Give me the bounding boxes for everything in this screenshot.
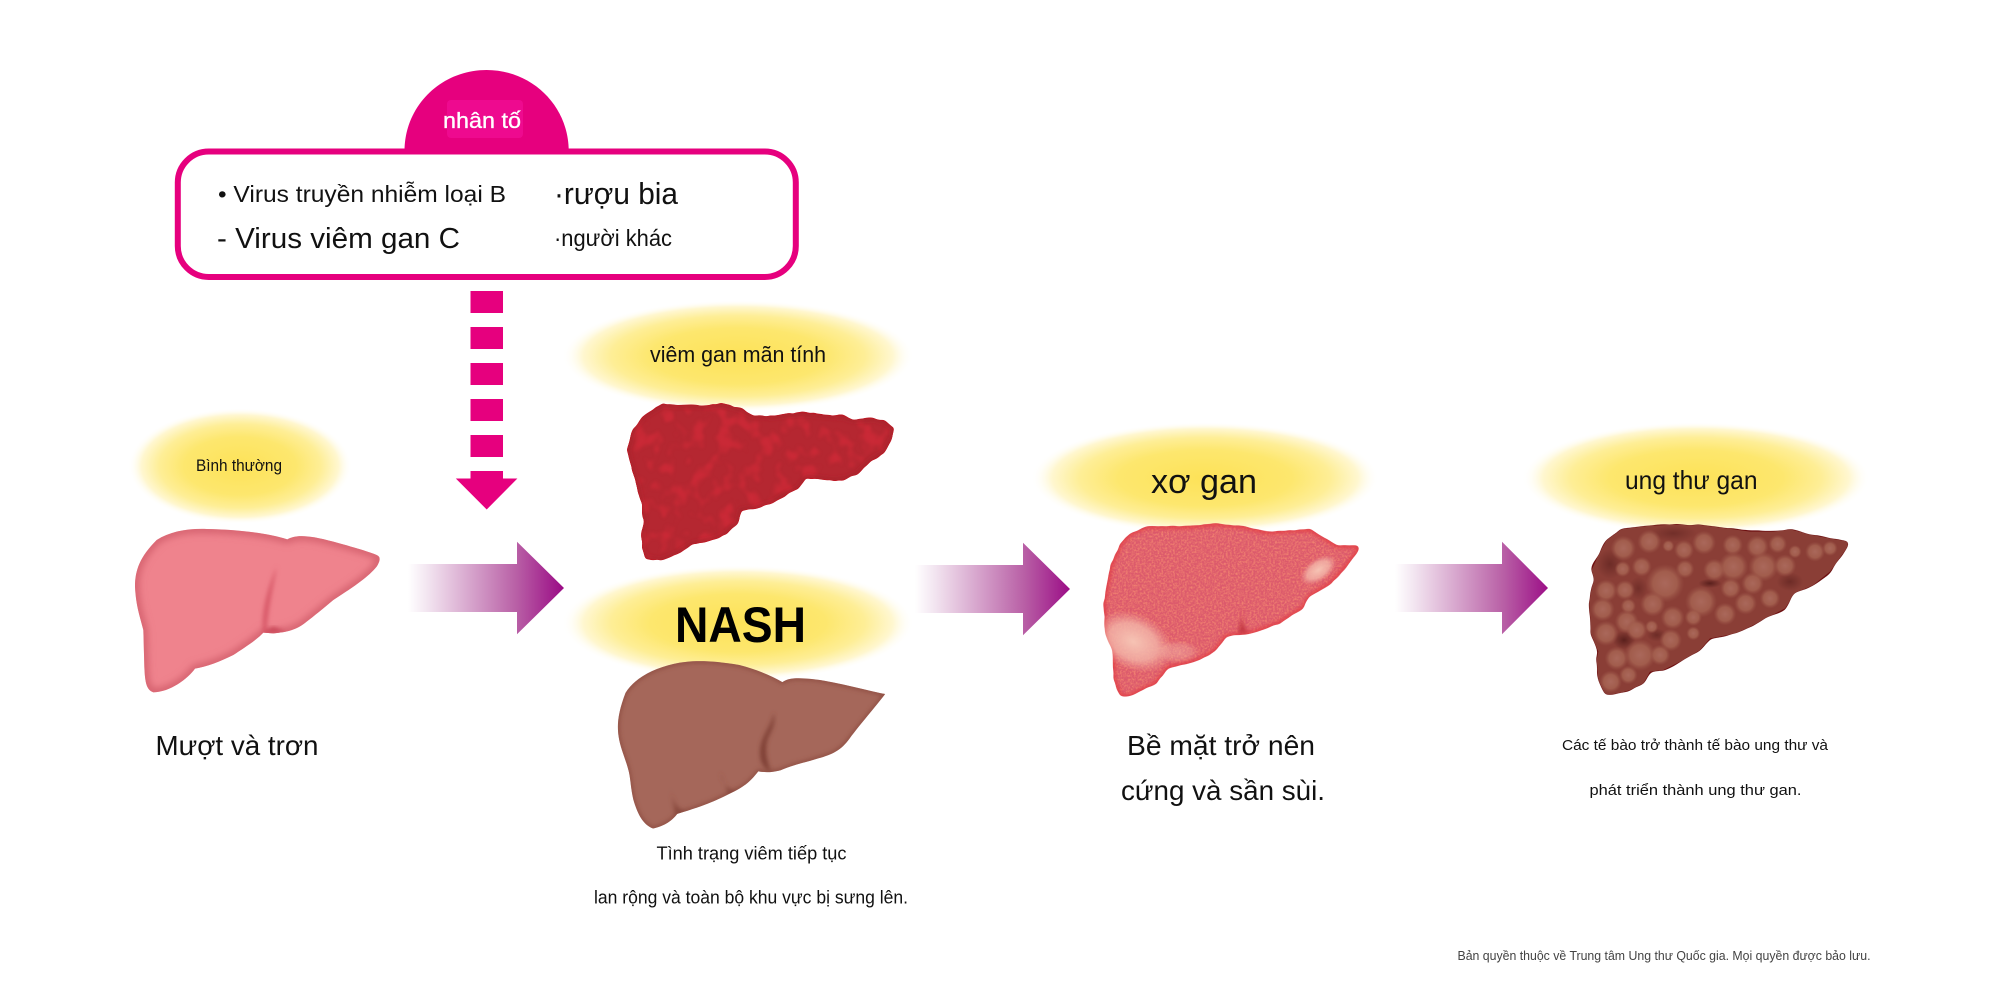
liver: tumour nodules — [1589, 524, 1848, 695]
caption: inflammation spreads: Tình trạng viêm tiếp tục — [656, 844, 846, 864]
caption: cells become cancerous: Các tế bào trở thành tế bào ung thư và — [1562, 737, 1829, 754]
factor: alcohol: ·rượu bia — [554, 176, 679, 211]
liver: inflamed red — [627, 404, 893, 561]
glow: NASH — [562, 565, 914, 681]
factor box outline — [178, 152, 796, 277]
panel: cirrhosis — [1031, 422, 1379, 806]
panel: chronic hepatitis — [562, 300, 914, 561]
panel: NASH — [562, 565, 914, 908]
arrow: normal to hepatitis — [408, 542, 564, 634]
glow: liver cancer — [1522, 422, 1870, 534]
copyright note: Bản quyền thuộc về Trung tâm Ung thư Quốc gia. Mọi quyền được bảo lưu. — [1458, 949, 1870, 963]
glow: normal — [128, 408, 352, 524]
heading tab: nhân tố: nhân tố — [443, 108, 521, 133]
arrow: cirrhosis to cancer — [1395, 542, 1548, 634]
liver: cirrhotic grainy — [1084, 523, 1360, 697]
factor: hepatitis B: • Virus truyền nhiễm loại B — [218, 181, 506, 207]
glow: cirrhosis — [1031, 422, 1379, 534]
liver: fatty brown — [618, 661, 885, 829]
heading tab: nhân tố — [404, 70, 569, 151]
panel: normal liver — [128, 408, 380, 761]
label: chronic hepatitis: viêm gan mãn tính — [650, 342, 826, 367]
caption: inflammation spreads — [594, 844, 908, 908]
label: NASH: NASH — [675, 597, 806, 653]
label: liver cancer: ung thư gan — [1625, 465, 1758, 495]
arrow: dashed pink down arrow — [456, 291, 517, 510]
caption: inflammation spreads: lan rộng và toàn bộ khu vực bị sưng lên. — [594, 888, 908, 908]
caption: hard and rough: cứng và sần sùi. — [1121, 775, 1325, 806]
arrow: hepatitis to cirrhosis — [915, 543, 1070, 635]
panel: risk factors — [178, 70, 796, 277]
caption: hard and rough — [1121, 730, 1325, 806]
factor: others: ·người khác — [554, 225, 672, 251]
liver: healthy pink — [135, 529, 380, 692]
caption: cells become cancerous — [1562, 737, 1829, 799]
factor: hepatitis C: - Virus viêm gan C — [217, 223, 460, 255]
panel: liver cancer — [1522, 422, 1870, 799]
caption: cells become cancerous: phát triển thành ung thư gan. — [1590, 782, 1802, 799]
glow: chronic hepatitis — [562, 300, 914, 412]
caption: smooth: Mượt và trơn — [156, 730, 318, 761]
caption: hard and rough: Bề mặt trở nên — [1127, 730, 1315, 761]
label: cirrhosis: xơ gan — [1151, 463, 1257, 501]
label: normal: Bình thường — [196, 457, 282, 475]
